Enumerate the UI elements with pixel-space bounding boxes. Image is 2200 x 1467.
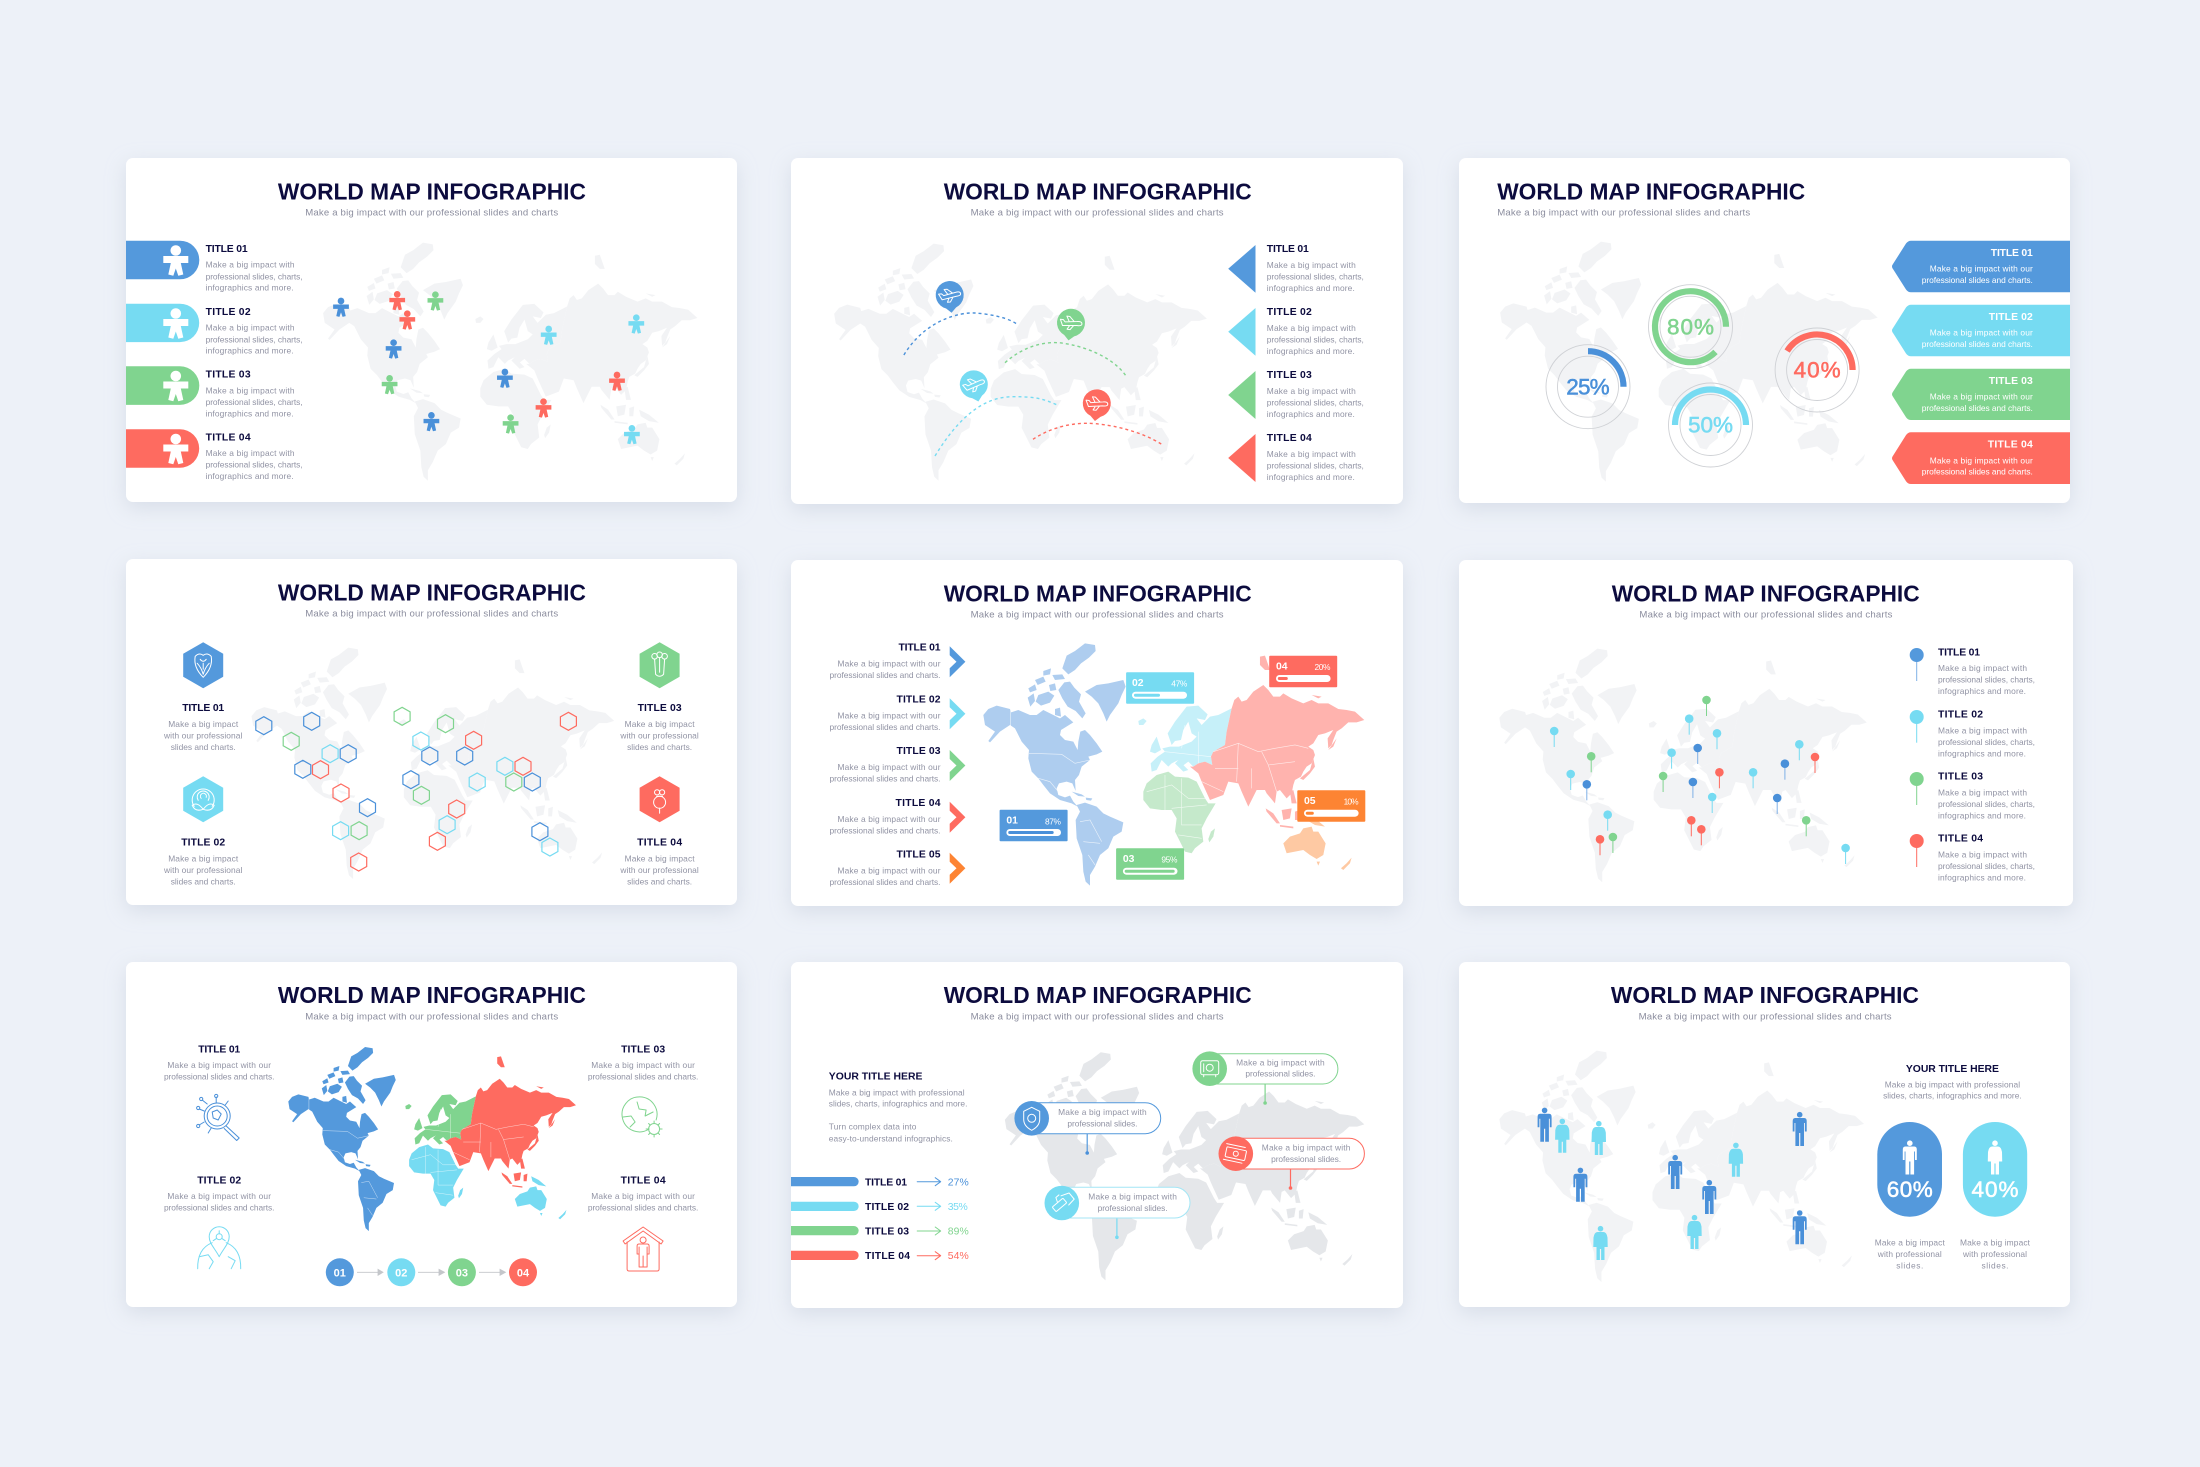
text block title 02 — [164, 1175, 274, 1213]
text block title 03: infographics and more. — [206, 408, 294, 418]
icon: virus magnifier — [197, 1094, 239, 1140]
ring 80% — [1648, 285, 1732, 369]
text block title 02: Make a big impact — [168, 853, 239, 863]
colored world map — [288, 1047, 576, 1231]
caption left: slides. — [1896, 1260, 1923, 1270]
intro text block: easy-to-understand infographics. — [829, 1133, 953, 1143]
text block title 01: professional slides, charts, — [206, 271, 303, 281]
text block title 04: Make a big impact with — [206, 448, 295, 458]
step circle 04: 04 — [517, 1267, 530, 1279]
world map — [1500, 242, 1878, 482]
colored world map — [983, 643, 1364, 886]
title: WORLD MAP INFOGRAPHIC — [278, 982, 586, 1008]
title: WORLD MAP INFOGRAPHIC — [278, 178, 586, 204]
text block title 01: professional slides and charts. — [164, 1072, 274, 1082]
legend pin blue — [1910, 648, 1924, 681]
text block title 04: with our professional — [619, 865, 699, 875]
callout 03: 95% — [1161, 855, 1178, 865]
ring 25%: 25% — [1566, 374, 1610, 399]
triangle marker 3 — [1228, 371, 1256, 419]
title — [278, 579, 586, 620]
banner title 03: Make a big impact with our — [1930, 392, 2033, 402]
stat row title 03: 89% — [948, 1226, 969, 1237]
text block title 02: professional slides and charts. — [830, 722, 940, 732]
chevron 1 — [950, 646, 965, 677]
ring 40% — [1775, 328, 1859, 412]
male figures — [1538, 1108, 1807, 1244]
text block title 04: professional slides, charts, — [1938, 861, 2035, 871]
text block title 01 — [164, 1044, 274, 1082]
step circle 03 — [448, 1258, 476, 1286]
callout 05: 05 — [1304, 796, 1316, 807]
text block title 03: Make a big impact — [625, 719, 695, 729]
world map — [1499, 649, 1867, 882]
text block title 01: Make a big impact with — [206, 260, 295, 270]
text block title 04 — [619, 837, 699, 886]
text block title 03: Make a big impact with our — [838, 762, 941, 772]
title: WORLD MAP INFOGRAPHIC — [944, 982, 1252, 1008]
small pins — [1550, 696, 1850, 864]
intro text block — [829, 1071, 967, 1143]
title — [944, 982, 1252, 1022]
world map — [252, 648, 614, 879]
step circle 03: 03 — [456, 1267, 468, 1279]
title: Make a big impact with our professional slides and charts — [1639, 610, 1893, 621]
text block title 02: professional slides, charts, — [1938, 737, 2035, 747]
callout cyan: professional slides. — [1098, 1203, 1168, 1213]
text block title 03: infographics and more. — [1267, 409, 1355, 419]
icon: red hexagon radish — [640, 776, 680, 822]
title: WORLD MAP INFOGRAPHIC — [278, 579, 586, 605]
text block title 01: Make a big impact with our — [838, 659, 941, 669]
text block title 01 — [830, 643, 941, 680]
text block title 01: TITLE 01 — [1938, 647, 1980, 658]
text block title 01: infographics and more. — [1267, 283, 1355, 293]
caption right — [1960, 1237, 2031, 1270]
banner title 02 — [1892, 305, 2070, 356]
intro text block: slides, charts, infographics and more. — [829, 1099, 967, 1109]
triangle marker 4 — [1228, 434, 1256, 482]
text block title 05: TITLE 05 — [896, 850, 941, 861]
callout 05 — [1297, 790, 1365, 822]
text block title 01: infographics and more. — [206, 283, 294, 293]
stat row title 02 — [791, 1202, 968, 1213]
text block title 03: TITLE 03 — [638, 703, 682, 714]
text block title 03 — [206, 370, 303, 418]
tab 3 with person icon — [126, 366, 199, 405]
text block title 01: professional slides, charts, — [1267, 272, 1364, 282]
map pin cyan with plane — [957, 367, 992, 405]
text block title 01: TITLE 01 — [182, 703, 224, 714]
stat row title 04: 54% — [948, 1251, 969, 1262]
text block title 02: TITLE 02 — [197, 1175, 241, 1186]
callout 04: 20% — [1314, 662, 1331, 672]
title — [278, 982, 586, 1022]
stat pill 40% — [1963, 1122, 2027, 1217]
banner title 03 — [1892, 369, 2070, 420]
banner title 01 — [1892, 241, 2070, 292]
map pin green with plane — [1055, 307, 1087, 342]
text block title 02: professional slides and charts. — [164, 1203, 274, 1213]
chevron 5 — [950, 853, 965, 884]
triangle marker 1 — [1228, 245, 1256, 293]
text block title 03: slides and charts. — [627, 742, 692, 752]
dashed flight routes — [904, 313, 1163, 456]
text block title 04: TITLE 04 — [206, 432, 251, 443]
caption left: with professional — [1877, 1249, 1942, 1259]
text block title 01: slides and charts. — [171, 742, 236, 752]
text block title 01: with our professional — [163, 731, 243, 741]
banner title 04 — [1892, 432, 2070, 484]
title: Make a big impact with our professional slides and charts — [305, 208, 558, 219]
ring 80%: 80% — [1667, 314, 1714, 339]
text block title 04: infographics and more. — [1938, 872, 2026, 882]
panel: flight routes slide — [791, 158, 1403, 504]
callout red: Make a big impact with — [1262, 1142, 1351, 1152]
banner title 03: professional slides and charts. — [1922, 403, 2033, 413]
text block title 02 — [206, 307, 303, 356]
legend pin red — [1910, 834, 1924, 867]
callout red: professional slides. — [1271, 1154, 1341, 1164]
arrow — [418, 1269, 444, 1275]
step circle 02: 02 — [395, 1267, 407, 1279]
stat row title 01: 27% — [948, 1177, 969, 1188]
intro text block: Turn complex data into — [829, 1122, 917, 1132]
world map — [834, 244, 1207, 481]
callout 01 — [1000, 810, 1068, 841]
text block title 02: professional slides, charts, — [206, 334, 303, 344]
text block title 02 — [1938, 710, 2035, 758]
panel: solid continents with icons slide — [126, 962, 737, 1307]
text block title 03 — [1938, 772, 2035, 820]
title — [1612, 580, 1920, 621]
text block title 01 — [1938, 647, 2035, 696]
text block title 02 — [830, 695, 941, 732]
callout red — [1218, 1136, 1364, 1190]
text block title 02: TITLE 02 — [896, 695, 941, 706]
text block title 02: Make a big impact with — [1267, 323, 1356, 333]
ring 50% — [1668, 383, 1752, 467]
stat row title 01 — [791, 1177, 969, 1188]
title: WORLD MAP INFOGRAPHIC — [1497, 178, 1805, 204]
callout blue — [1014, 1101, 1161, 1155]
text block title 03: Make a big impact with our — [591, 1060, 695, 1070]
text block title 02: with our professional — [163, 865, 243, 875]
caption right: Make a big impact — [1960, 1237, 2031, 1247]
panel: callouts on map slide — [791, 962, 1403, 1308]
text block title 02: TITLE 02 — [1938, 710, 1983, 721]
callout 01: 01 — [1006, 816, 1018, 827]
text block title 01: Make a big impact with — [1267, 260, 1356, 270]
text block title 02 — [163, 837, 243, 886]
text block title 02: TITLE 02 — [1267, 307, 1312, 318]
text block title 01: TITLE 01 — [1267, 244, 1309, 255]
intro text block: Make a big impact with professional — [829, 1087, 965, 1097]
text block title 01 — [206, 244, 303, 293]
text block title 03: professional slides and charts. — [830, 773, 940, 783]
banner title 02: professional slides and charts. — [1922, 339, 2033, 349]
arrow — [357, 1269, 383, 1275]
text block title 01: infographics and more. — [1938, 686, 2026, 696]
text block title 03 — [619, 703, 699, 752]
caption right: with professional — [1962, 1249, 2027, 1259]
text block title 03: infographics and more. — [1938, 810, 2026, 820]
panel: people map slide — [126, 158, 737, 502]
text block title 02: TITLE 02 — [206, 307, 251, 318]
text block title 02: Make a big impact with our — [167, 1191, 271, 1201]
stat pill 40%: 40% — [1972, 1177, 2018, 1202]
text block title 01: TITLE 01 — [206, 244, 248, 255]
stat row title 04 — [791, 1251, 969, 1262]
callout blue: professional slides. — [1067, 1118, 1137, 1128]
arrow — [479, 1269, 506, 1275]
ring 50%: 50% — [1688, 413, 1733, 438]
callout cyan: Make a big impact with — [1088, 1192, 1177, 1202]
text block title 04: TITLE 04 — [1938, 834, 1983, 845]
text block title 04 — [588, 1175, 698, 1213]
text block title 03 — [830, 746, 941, 783]
female figures — [1555, 1119, 1743, 1260]
banner title 01: Make a big impact with our — [1930, 264, 2033, 274]
text block title 01: TITLE 01 — [198, 1044, 240, 1055]
text block title 02: Make a big impact with — [1938, 725, 2027, 735]
text block title 02: slides and charts. — [171, 876, 236, 886]
text block title 05: professional slides and charts. — [830, 877, 940, 887]
step circle 04 — [509, 1258, 537, 1286]
stat row title 03: TITLE 03 — [865, 1226, 909, 1237]
title — [944, 178, 1252, 219]
stat row title 01: TITLE 01 — [865, 1177, 907, 1188]
title: Make a big impact with our professional slides and charts — [971, 1011, 1224, 1022]
text block title 03 — [588, 1044, 698, 1082]
icon: person in house — [623, 1227, 663, 1271]
callout green: professional slides. — [1245, 1069, 1315, 1079]
icon: globe with virus — [622, 1097, 662, 1137]
text block title 01: TITLE 01 — [898, 643, 941, 654]
callout 05: 10% — [1344, 797, 1359, 807]
tab 1 with person icon — [126, 241, 199, 279]
chevron 2 — [950, 698, 965, 729]
caption left — [1875, 1237, 1945, 1270]
panel: population share slide — [1459, 962, 2070, 1307]
banner title 04: Make a big impact with our — [1930, 455, 2033, 465]
caption right: slides. — [1982, 1260, 2008, 1270]
text block title 05: Make a big impact with our — [838, 866, 941, 876]
title: Make a big impact with our professional slides and charts — [971, 208, 1224, 219]
callout 03: 03 — [1123, 854, 1135, 865]
chevron 4 — [950, 802, 965, 833]
stat row title 02: 35% — [948, 1202, 968, 1213]
title: WORLD MAP INFOGRAPHIC — [944, 178, 1252, 204]
title — [1497, 178, 1805, 219]
title: Make a big impact with our professional slides and charts — [305, 1011, 558, 1022]
text block title 04: professional slides and charts. — [588, 1203, 698, 1213]
text block title 04: TITLE 04 — [896, 798, 941, 809]
callout 04 — [1269, 656, 1337, 687]
text block title 01: Make a big impact — [168, 719, 239, 729]
stat pill 60% — [1877, 1122, 1942, 1217]
banner title 03: TITLE 03 — [1989, 376, 2033, 387]
tab 4 with person icon — [126, 429, 199, 468]
banner title 02: TITLE 02 — [1989, 312, 2033, 323]
text block title 03: professional slides, charts, — [206, 397, 303, 407]
text block title 04: infographics and more. — [1267, 472, 1355, 482]
text block title 04 — [1938, 834, 2035, 882]
text block your title here: YOUR TITLE HERE — [1906, 1064, 1999, 1075]
text block title 04: TITLE 04 — [637, 837, 682, 848]
banner title 02: Make a big impact with our — [1930, 328, 2033, 338]
title: Make a big impact with our professional slides and charts — [1497, 208, 1750, 219]
hexagon outline markers — [256, 707, 576, 871]
text block title 03: professional slides, charts, — [1938, 799, 2035, 809]
step circle 02 — [387, 1258, 415, 1286]
text block title 02: Make a big impact with — [206, 323, 295, 333]
world map — [1499, 1051, 1864, 1282]
text block your title here — [1883, 1064, 2022, 1101]
callout green: Make a big impact with — [1236, 1057, 1325, 1067]
text block title 04: slides and charts. — [627, 876, 692, 886]
text block title 04: TITLE 04 — [1267, 433, 1312, 444]
panel: pin markers slide — [1459, 560, 2073, 906]
callout cyan — [1044, 1186, 1190, 1239]
text block title 04: professional slides and charts. — [830, 825, 940, 835]
text block title 01 — [163, 703, 243, 752]
text block title 01 — [1267, 244, 1364, 293]
text block title 02: infographics and more. — [206, 346, 294, 356]
text block title 04: Make a big impact with — [1938, 849, 2027, 859]
title — [278, 178, 586, 219]
callout 02: 47% — [1171, 679, 1188, 689]
banner title 01: TITLE 01 — [1991, 248, 2033, 259]
stat row title 04: TITLE 04 — [865, 1251, 910, 1262]
text block title 03: TITLE 03 — [1938, 772, 1983, 783]
chevron 3 — [950, 750, 965, 781]
text block title 03: TITLE 03 — [896, 746, 941, 757]
text block title 04: Make a big impact with — [1267, 449, 1356, 459]
text block title 01: professional slides and charts. — [830, 670, 940, 680]
title: WORLD MAP INFOGRAPHIC — [1612, 580, 1920, 606]
text block title 04 — [830, 798, 941, 835]
icon: biohazard pin over globe — [198, 1227, 241, 1269]
text block title 02: infographics and more. — [1938, 748, 2026, 758]
callout 01: 87% — [1045, 816, 1062, 826]
title: Make a big impact with our professional slides and charts — [971, 610, 1224, 621]
stat row title 03 — [791, 1226, 969, 1237]
person markers — [333, 291, 644, 444]
text block title 01: professional slides, charts, — [1938, 675, 2035, 685]
text block title 01: Make a big impact with our — [167, 1060, 271, 1070]
text block title 03: TITLE 03 — [206, 370, 251, 381]
callout blue: Make a big impact with — [1058, 1107, 1147, 1117]
callout 03 — [1116, 848, 1184, 880]
text block title 04: Make a big impact with our — [838, 814, 941, 824]
caption left: Make a big impact — [1875, 1237, 1945, 1247]
ring 25% — [1546, 345, 1630, 429]
panel: percentage rings slide — [1459, 158, 2070, 503]
legend pin green — [1910, 772, 1924, 805]
step circle 01 — [326, 1258, 354, 1286]
text block title 03: Make a big impact with — [1938, 787, 2027, 797]
stat row title 02: TITLE 02 — [865, 1202, 909, 1213]
title — [944, 580, 1252, 621]
text block title 04: TITLE 04 — [621, 1175, 666, 1186]
text block title 02: TITLE 02 — [181, 837, 225, 848]
text block title 03 — [1267, 370, 1364, 419]
text block your title here: slides, charts, infographics and more. — [1883, 1091, 2022, 1101]
map pin blue with plane — [934, 280, 965, 314]
text block title 04: Make a big impact — [625, 853, 695, 863]
world map — [323, 243, 697, 481]
icon: cyan hexagon cotton — [183, 776, 223, 822]
banner title 04: professional slides and charts. — [1922, 467, 2033, 477]
step circle 01: 01 — [334, 1267, 346, 1279]
title: Make a big impact with our professional slides and charts — [305, 609, 558, 620]
title: WORLD MAP INFOGRAPHIC — [944, 580, 1252, 606]
title — [1611, 982, 1919, 1022]
text block title 02: infographics and more. — [1267, 346, 1355, 356]
text block title 04: professional slides, charts, — [206, 460, 303, 470]
text block title 04 — [206, 432, 303, 481]
stat pill 60%: 60% — [1887, 1177, 1933, 1202]
text block title 03: TITLE 03 — [621, 1044, 665, 1055]
panel: hexagon markers slide — [126, 559, 737, 905]
panel: colored continents slide — [791, 560, 1403, 906]
text block title 02: professional slides, charts, — [1267, 335, 1364, 345]
text block title 03: TITLE 03 — [1267, 370, 1312, 381]
callout green — [1192, 1051, 1338, 1105]
banner title 01: professional slides and charts. — [1922, 275, 2033, 285]
tab 2 with person icon — [126, 304, 199, 342]
callout 02: 02 — [1132, 678, 1144, 689]
title: WORLD MAP INFOGRAPHIC — [1611, 982, 1919, 1008]
title: Make a big impact with our professional slides and charts — [1639, 1011, 1892, 1022]
map pin red with plane — [1081, 388, 1112, 422]
triangle marker 2 — [1228, 308, 1256, 356]
text block title 02: Make a big impact with our — [838, 711, 941, 721]
text block title 03: with our professional — [619, 731, 699, 741]
intro text block: YOUR TITLE HERE — [829, 1071, 922, 1082]
callout 04: 04 — [1276, 661, 1288, 672]
callout 02 — [1126, 672, 1194, 704]
text block title 01: Make a big impact with — [1938, 663, 2027, 673]
text block title 03: professional slides and charts. — [588, 1072, 698, 1082]
world map — [1005, 1052, 1364, 1280]
text block title 03: Make a big impact with — [1267, 386, 1356, 396]
text block your title here: Make a big impact with professional — [1885, 1079, 2020, 1089]
text block title 02 — [1267, 307, 1364, 356]
text block title 04: Make a big impact with our — [591, 1191, 695, 1201]
icon: blue hexagon rose — [183, 642, 223, 688]
icon: green hexagon celery — [640, 642, 680, 688]
text block title 04 — [1267, 433, 1364, 482]
banner title 04: TITLE 04 — [1988, 440, 2033, 451]
ring 40%: 40% — [1794, 358, 1841, 383]
text block title 05 — [830, 850, 941, 887]
text block title 03: Make a big impact with — [206, 385, 295, 395]
text block title 04: professional slides, charts, — [1267, 461, 1364, 471]
text block title 04: infographics and more. — [206, 471, 294, 481]
text block title 03: professional slides, charts, — [1267, 398, 1364, 408]
legend pin cyan — [1910, 710, 1924, 743]
